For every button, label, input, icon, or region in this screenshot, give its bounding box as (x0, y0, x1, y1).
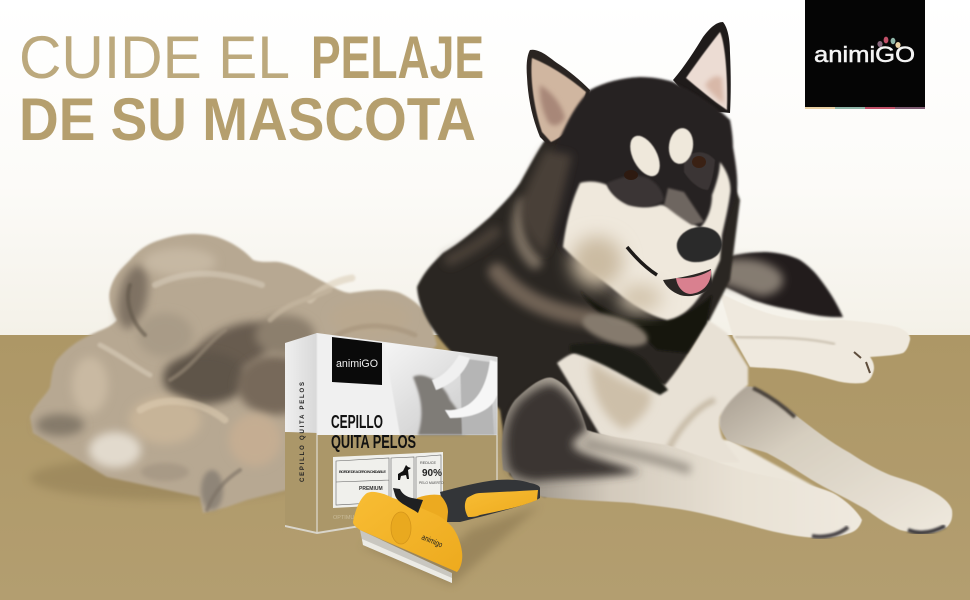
dog: left ear (527, 50, 590, 147)
dog: near front leg (502, 377, 862, 538)
box: footer text: OPTIMUS (333, 515, 358, 521)
box: logo: animiGO (336, 358, 378, 370)
box: label panel: REDUCE (420, 461, 437, 465)
dog: neck ruff side (520, 150, 572, 255)
dog (417, 22, 952, 538)
dog: skull (550, 77, 737, 313)
dog: eyes (624, 170, 638, 180)
dog: head (520, 22, 737, 320)
box: label panel: PREMIUM (359, 486, 383, 492)
logo: animigo (805, 0, 925, 109)
dog: nose (677, 227, 722, 262)
dog: cheek ruff (563, 162, 731, 320)
box: label panel (333, 452, 444, 508)
dog: body dark coat (417, 90, 740, 497)
box: front (317, 333, 497, 435)
dog: mouth line (627, 247, 657, 275)
product box: QUITA PELOS (331, 431, 416, 452)
dog: mask (607, 175, 664, 207)
floor (0, 335, 970, 600)
dog: mouth (663, 269, 712, 296)
brush: logo: animigo (420, 533, 444, 550)
dog: brows (624, 131, 666, 181)
dog: diagonal dark stripe (570, 343, 668, 395)
dog: frosty neck patch (579, 307, 651, 353)
product box (285, 333, 497, 534)
box: label panel: 90% (422, 468, 442, 479)
brush: handle (440, 480, 540, 522)
dog: far front leg (719, 386, 952, 533)
dog: tongue (676, 270, 711, 294)
title emphasis: pelaje: PELAJE (311, 24, 484, 91)
dog: chest (557, 320, 748, 462)
title line 2: DE SU MASCOTA (19, 86, 476, 153)
dog: body tan streaks (450, 205, 590, 318)
dog: right ear (673, 22, 731, 113)
title (19, 24, 484, 153)
background wall (0, 0, 970, 335)
dog: snout bridge (664, 188, 704, 225)
box: label panel: PELO MUERTO (419, 481, 444, 485)
box: heading: CEPILLO (331, 411, 383, 432)
dog: shoulder dark patch (506, 385, 640, 481)
title line 1: CUIDE EL (19, 24, 290, 91)
box: spine text: CEPILLO QUITA PELOS (300, 382, 306, 482)
dog: tail (717, 252, 843, 317)
brush: head (353, 492, 462, 572)
brush: lever (393, 488, 423, 513)
logo: animigo: animiGO (814, 42, 915, 67)
box: dog icon (398, 465, 411, 480)
dog: neck band (580, 290, 712, 353)
dog: gap between legs (640, 440, 830, 495)
deshedding brush (353, 480, 540, 585)
brush: button (391, 512, 411, 544)
box: logo (332, 337, 382, 385)
box: label panel: BORDE DE ACERO INOXIDABLE (339, 469, 386, 474)
fur pile (30, 234, 437, 513)
box: photo (384, 343, 497, 435)
brush: neck (415, 495, 448, 525)
box: spine (285, 333, 317, 433)
dog: hind legs (720, 293, 910, 383)
brush: blade (360, 530, 452, 583)
